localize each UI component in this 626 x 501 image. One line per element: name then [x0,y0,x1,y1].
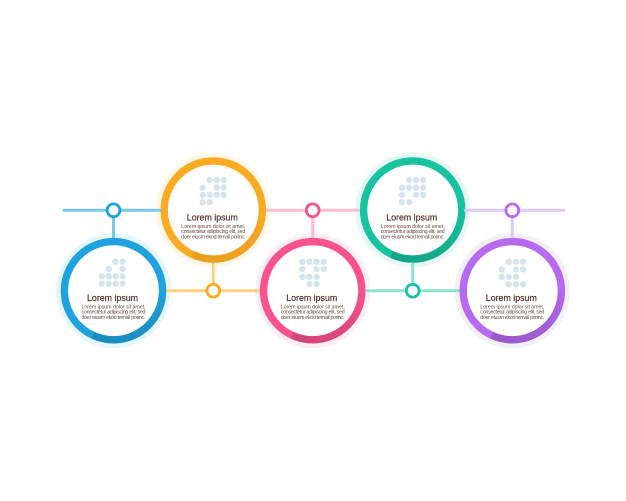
text: blue step: consectetur adipiscing elit, sed [82,310,146,316]
text: pink step [281,304,345,321]
panel: blue step [56,233,171,348]
icon: blue dot pattern [98,258,126,287]
heading: blue step: Lorem ipsum [87,292,138,303]
text: purple step: doer eiusm ekod temail porinc. [480,315,544,321]
icon: green dot pattern [399,177,426,206]
text: orange step: consectetur adipiscing elit, sed [181,229,245,235]
connector: blue timeline [64,210,160,238]
text: purple step [480,304,544,321]
text: pink step: doer eiusm ekod temail porinc. [281,315,345,321]
node: orange marker [207,284,220,297]
text: orange step [181,224,245,240]
icon: purple dot pattern [498,258,526,288]
node: green marker [406,284,419,297]
text: purple step: consectetur adipiscing elit, sed [480,310,544,316]
heading: purple step: Lorem ipsum [486,292,537,303]
icon: pink dot pattern [299,258,327,287]
text: blue step: Lorem ipsum dolor sit amet, [82,305,146,311]
text: green step: consectetur adipiscing elit, sed [381,229,445,235]
text: orange step: doer eiusm ekod temail porinc. [181,234,245,240]
text: orange step: Lorem ipsum dolor sit amet, [181,224,245,230]
text: green step: Lorem ipsum dolor sit amet, [381,224,445,230]
panel: orange step [156,152,271,268]
text: green step [381,224,445,240]
connector: green timeline [366,263,460,291]
text: purple step: Lorem ipsum dolor sit amet, [480,305,544,311]
connector: purple timeline [466,210,564,238]
icon: orange dot pattern [200,177,227,206]
panel: pink step [255,233,370,348]
text: pink step: Lorem ipsum dolor sit amet, [281,305,345,311]
text: blue step [82,304,146,321]
text: green step: doer eiusm ekod temail porinc. [381,234,445,240]
node: blue marker [107,204,120,217]
node: pink marker [306,204,319,217]
heading: orange step: Lorem ipsum [187,211,238,222]
node: purple marker [506,204,519,217]
connector: orange timeline [166,263,260,291]
text: pink step: consectetur adipiscing elit, sed [281,310,345,316]
heading: green step: Lorem ipsum [386,211,437,222]
panel: green step [355,152,470,268]
panel: purple step [455,233,570,348]
connector: pink timeline [266,210,360,238]
text: blue step: doer eiusm ekod temail porinc. [82,315,146,321]
heading: pink step: Lorem ipsum [286,292,337,303]
